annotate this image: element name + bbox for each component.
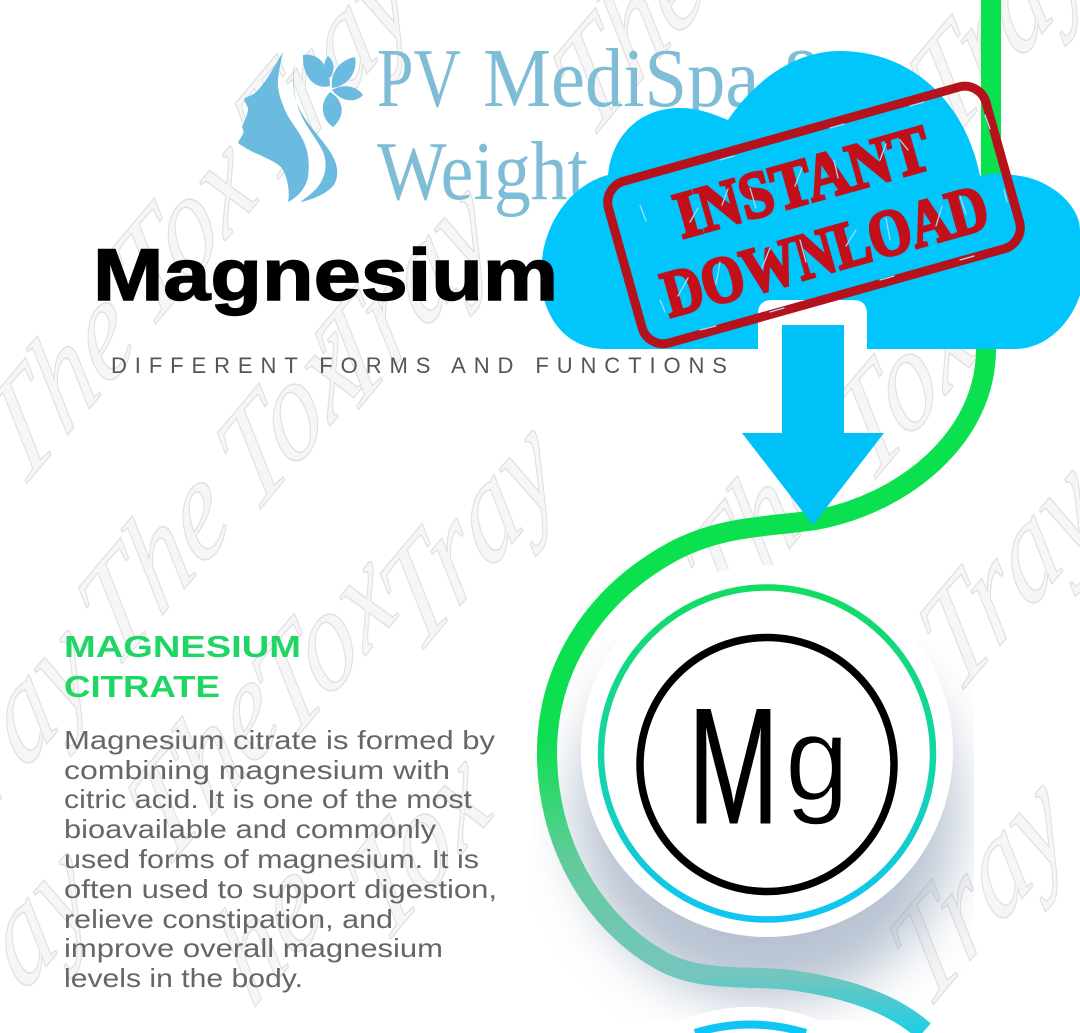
watermark: The Tox Tray: Tox bbox=[194, 280, 381, 542]
body text: Magnesium citrate is formed by bbox=[64, 725, 495, 755]
logo text: first line: MediSpa & bbox=[483, 32, 838, 125]
body text bbox=[64, 725, 497, 993]
icon: hair strand bbox=[293, 63, 337, 202]
cyan ring bbox=[695, 1024, 806, 1033]
body text: relieve constipation, and bbox=[64, 904, 393, 934]
stamp text: download: DOWNLOAD bbox=[654, 171, 996, 332]
body text: bioavailable and commonly bbox=[64, 814, 436, 844]
body text: improve overall magnesium bbox=[64, 933, 443, 963]
icon: flower bbox=[303, 55, 363, 127]
watermark: The Tox Tray: Tox bbox=[229, 510, 416, 772]
watermark: The Tox Tray: Tox bbox=[809, 250, 996, 512]
body text: often used to support digestion, bbox=[64, 874, 497, 904]
watermark: The Tox Tray: Tray bbox=[292, 139, 514, 443]
stamp: instant download bbox=[603, 81, 1025, 349]
green timeline, upper segment bbox=[981, 0, 1001, 185]
stamp distress scratches bbox=[640, 102, 1007, 330]
body text: combining magnesium with bbox=[64, 755, 450, 785]
subtitle: DIFFERENT FORMS AND FUNCTIONS bbox=[111, 353, 727, 378]
logo: PV MediSpa and Weight bbox=[238, 32, 838, 218]
watermark: The Tox Tray: he bbox=[193, 817, 342, 1033]
stamp text: instant: INSTANT bbox=[666, 112, 938, 253]
watermark: The Tox Tray: Tray bbox=[357, 379, 579, 683]
Mg symbol: M bbox=[688, 674, 779, 858]
logo text: second line: Weight bbox=[377, 125, 588, 218]
Mg element badge bbox=[581, 565, 953, 937]
section heading: magnesium citrate: MAGNESIUM bbox=[64, 629, 301, 664]
white disc bbox=[655, 1007, 845, 1033]
body text: citric acid. It is one of the most bbox=[64, 784, 473, 814]
Mg symbol: g bbox=[785, 692, 849, 826]
gradient ring bbox=[601, 588, 933, 920]
next badge, partly visible bbox=[655, 1007, 845, 1033]
icon: face silhouette bbox=[238, 52, 309, 202]
watermark: The Tox Tray: The bbox=[55, 426, 250, 697]
body text: levels in the body. bbox=[64, 963, 303, 993]
stamp border bbox=[603, 81, 1025, 349]
white disc bbox=[581, 565, 953, 937]
section heading: magnesium citrate: CITRATE bbox=[64, 669, 220, 704]
download arrow bbox=[742, 325, 884, 525]
disc shadow bbox=[577, 622, 957, 1002]
watermark: The Tox Tray: The bbox=[105, 626, 300, 897]
green timeline over shadow bbox=[547, 753, 924, 1031]
black circle bbox=[640, 638, 894, 892]
logo text: first line: PV bbox=[377, 32, 461, 125]
cloud icon bbox=[541, 51, 1080, 349]
body text: used forms of magnesium. It is bbox=[64, 844, 479, 874]
green timeline, lower segment bbox=[547, 349, 986, 1031]
watermark: The Tox Tray: Tox bbox=[324, 710, 511, 972]
title: Magnesium bbox=[93, 235, 558, 316]
section heading: magnesium citrate bbox=[64, 629, 301, 704]
watermark: The Tox Tray: Tox bbox=[89, 95, 276, 357]
watermark: The Tox Tray: The bbox=[660, 386, 855, 657]
